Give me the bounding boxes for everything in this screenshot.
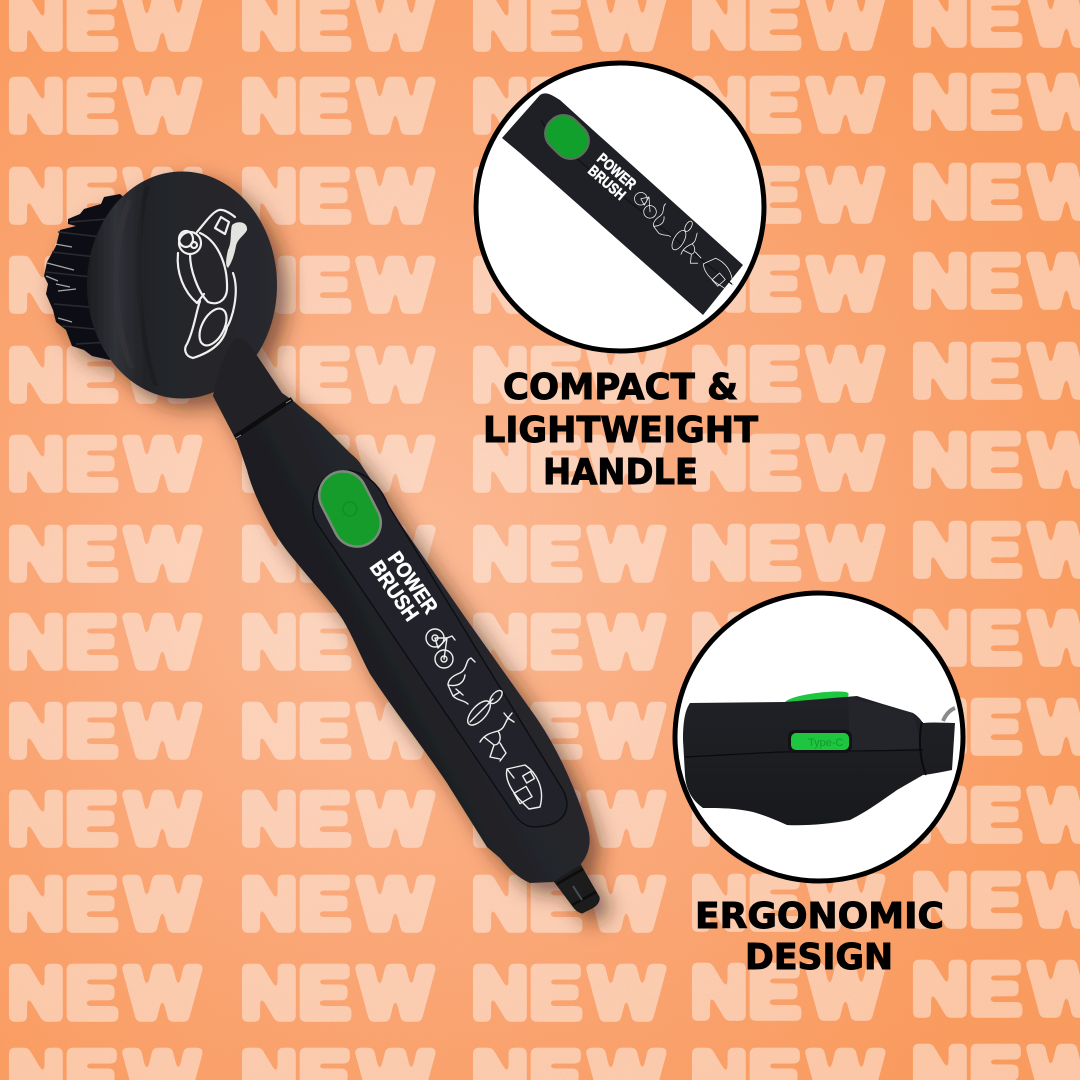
- repeating NEW pattern: NEW: [472, 690, 663, 772]
- repeating NEW pattern: NEW: [691, 777, 882, 859]
- label: ergonomic design: ERGONOMIC: [695, 896, 944, 937]
- repeating NEW pattern: NEW: [241, 423, 432, 505]
- repeating NEW pattern: NEW: [241, 601, 432, 683]
- repeating NEW pattern: NEW: [472, 423, 663, 505]
- repeating NEW pattern: NEW: [691, 689, 882, 771]
- repeating NEW pattern: NEW: [472, 952, 663, 1034]
- control panel: [313, 471, 567, 827]
- head line art: [178, 210, 247, 358]
- side view handle silhouette: [683, 696, 955, 825]
- repeating NEW pattern: NEW: [8, 863, 199, 945]
- inset circle: handle close-up: [476, 63, 764, 351]
- side view top button: [785, 692, 849, 702]
- repeating NEW pattern: NEW: [691, 862, 882, 944]
- USB-C port cover: [788, 730, 852, 753]
- panel label: BRUSH: [365, 557, 423, 626]
- repeating NEW pattern: NEW: [8, 952, 199, 1034]
- USB-C port cover: Type-C: [808, 737, 844, 749]
- product: power brush: [44, 172, 599, 913]
- repeating NEW pattern: NEW: [691, 243, 882, 325]
- repeating NEW pattern: NEW: [8, 601, 199, 683]
- neck: [213, 338, 292, 440]
- close-up label: POWER: [593, 150, 639, 193]
- repeating NEW pattern: NEW: [691, 512, 882, 594]
- repeating NEW pattern: NEW: [241, 155, 432, 237]
- repeating NEW pattern: NEW: [241, 690, 432, 772]
- repeating NEW pattern: NEW: [472, 334, 663, 416]
- power button: [309, 462, 391, 556]
- repeating NEW pattern: NEW: [8, 423, 199, 505]
- repeating NEW pattern: NEW: [691, 600, 882, 682]
- label: compact and lightweight handle: [483, 367, 758, 493]
- inset circle: ergonomic side view: [675, 593, 963, 881]
- repeating NEW pattern: NEW: [691, 422, 882, 504]
- label: ergonomic design: DESIGN: [745, 937, 893, 978]
- label: compact and lightweight handle: HANDLE: [543, 452, 698, 493]
- repeating NEW pattern: NEW: [472, 601, 663, 683]
- repeating NEW pattern: NEW: [472, 863, 663, 945]
- repeating NEW pattern: NEW: [691, 333, 882, 415]
- label: ergonomic design: [695, 896, 944, 978]
- hose connector: [553, 864, 599, 913]
- bristles: [44, 194, 150, 360]
- close-up icons: [633, 190, 734, 292]
- repeating NEW pattern: NEW: [241, 778, 432, 860]
- repeating NEW pattern: NEW: [691, 64, 882, 146]
- handle body: [235, 399, 590, 883]
- close-up power button: [544, 114, 590, 160]
- repeating NEW pattern: NEW: [8, 155, 199, 237]
- repeating NEW pattern: NEW: [472, 155, 663, 237]
- repeating NEW pattern: NEW: [691, 951, 882, 1033]
- label: compact and lightweight handle: COMPACT &: [503, 367, 738, 408]
- repeating NEW pattern: NEW: [8, 778, 199, 860]
- repeating NEW pattern: NEW: [8, 690, 199, 772]
- repeating NEW pattern: NEW: [241, 952, 432, 1034]
- repeating NEW pattern: NEW: [8, 513, 199, 595]
- close-up label: [587, 152, 636, 201]
- panel label: POWER: [383, 548, 442, 618]
- repeating NEW pattern: NEW: [241, 334, 432, 416]
- repeating NEW pattern: NEW: [241, 513, 432, 595]
- close-up label: BRUSH: [584, 162, 629, 204]
- repeating NEW pattern: NEW: [241, 244, 432, 326]
- repeating NEW pattern: NEW: [241, 65, 432, 147]
- repeating NEW pattern: NEW: [472, 513, 663, 595]
- repeating NEW pattern: NEW: [691, 154, 882, 236]
- repeating NEW pattern: NEW: [8, 334, 199, 416]
- repeating NEW pattern: NEW: [8, 244, 199, 326]
- repeating NEW pattern: NEW: [241, 863, 432, 945]
- repeating NEW pattern: NEW: [472, 778, 663, 860]
- close-up handle body: [502, 93, 743, 315]
- activity icons: [426, 629, 542, 809]
- repeating NEW pattern: NEW: [472, 65, 663, 147]
- brush head disc: [87, 172, 277, 398]
- repeating NEW pattern: NEW: [472, 244, 663, 326]
- repeating NEW pattern: NEW: [8, 65, 199, 147]
- label: compact and lightweight handle: LIGHTWEIGHT: [483, 410, 758, 451]
